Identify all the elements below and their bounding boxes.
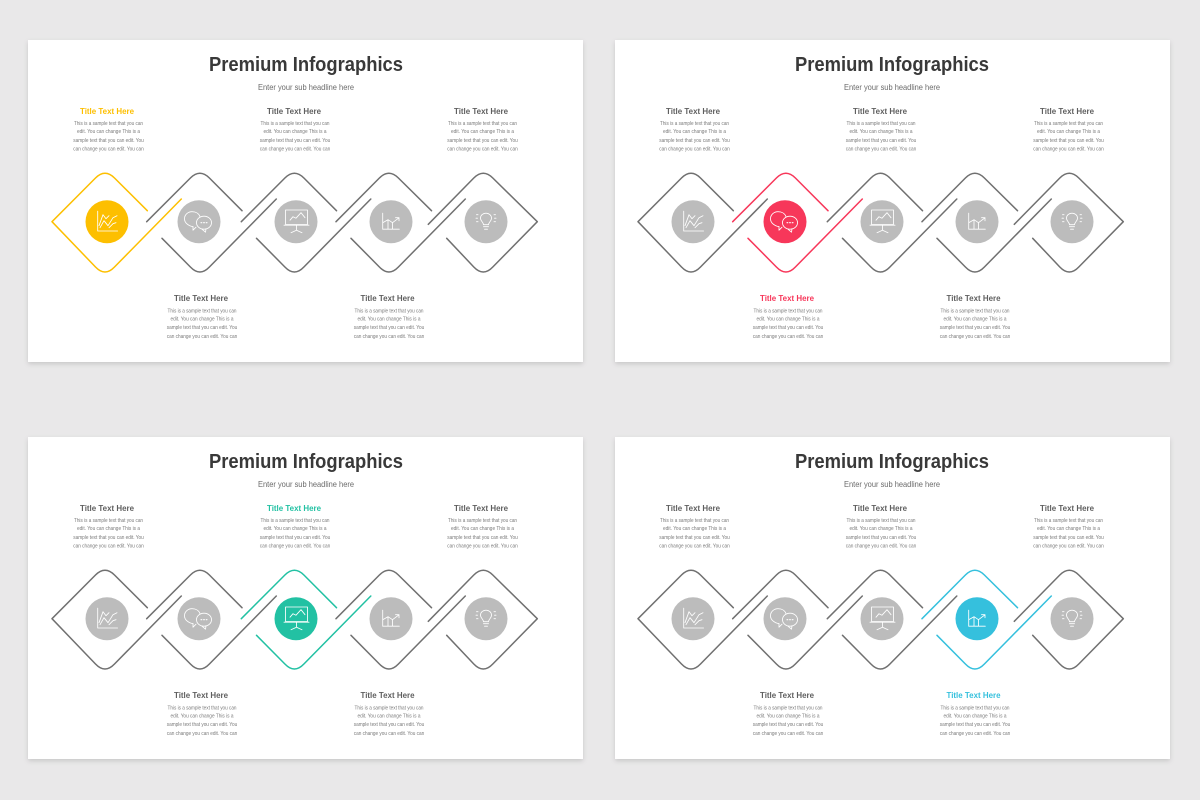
text block 3: can change you can edit. You can [846,544,916,550]
text block 3: sample text that you can edit. You [260,535,330,541]
text block 5: sample text that you can edit. You [447,138,518,144]
text block 2: can change you can edit. You can [753,731,823,737]
text block 2: can change you can edit. You can [753,334,823,340]
icon: presentation board [274,200,318,243]
panel background [615,40,1170,362]
text block 4: This is a sample text that you can [354,308,424,314]
text block 5: can change you can edit. You can [447,146,518,152]
text block 4: Title Text Here [946,293,1001,303]
panel: yellow variant [28,40,583,362]
text block 3: This is a sample text that you can [260,121,330,127]
text block 5: sample text that you can edit. You [1033,138,1104,144]
text block 3 [846,503,916,550]
text block 1: edit. You can change This is a [663,526,726,532]
subtitle: Enter your sub headline here [258,479,354,489]
text block 1: This is a sample text that you can [660,518,729,524]
text block 4: Title Text Here [360,293,415,303]
icon: speech bubbles [178,597,220,640]
text block 5: can change you can edit. You can [447,544,518,550]
text block 2: can change you can edit. You can [167,334,237,340]
text block 1 [659,503,730,550]
text block 1: Title Text Here [80,106,134,116]
icon: presentation board [274,597,318,640]
text block 1 [73,503,144,550]
text block 2: Title Text Here [174,690,228,700]
text block 4 [354,690,424,737]
text block 2: sample text that you can edit. You [167,722,237,728]
text block 4: This is a sample text that you can [940,308,1010,314]
text block 3: Title Text Here [267,503,321,513]
text block 5: This is a sample text that you can [448,518,517,524]
text block 4: sample text that you can edit. You [940,325,1010,331]
text block 4: can change you can edit. You can [940,334,1010,340]
text block 2: can change you can edit. You can [167,731,237,737]
icon: presentation board [860,200,904,243]
text block 1: edit. You can change This is a [663,129,726,135]
text block 5: This is a sample text that you can [1034,518,1103,524]
text block 3: edit. You can change This is a [850,526,913,532]
text block 3: can change you can edit. You can [846,146,916,152]
text block 1: This is a sample text that you can [660,121,729,127]
text block 4: This is a sample text that you can [354,706,424,712]
text block 3: edit. You can change This is a [264,129,327,135]
text block 4: edit. You can change This is a [358,316,421,322]
text block 1: sample text that you can edit. You [73,138,144,144]
icon: speech bubbles [764,597,806,640]
text block 3: edit. You can change This is a [850,129,913,135]
text block 4: Title Text Here [360,690,415,700]
text block 5: edit. You can change This is a [1037,526,1100,532]
icon: light bulb [1050,200,1094,243]
text block 5: edit. You can change This is a [451,526,514,532]
text block 2 [167,293,237,340]
text block 1: can change you can edit. You can [659,146,730,152]
diamond chain [638,173,1123,272]
text block 5: Title Text Here [1040,503,1094,513]
text block 5: edit. You can change This is a [451,129,514,135]
icon: speech bubbles [764,200,806,243]
title: Premium Infographics [795,54,989,76]
text block 2: This is a sample text that you can [168,706,237,712]
text block 3: Title Text Here [853,106,907,116]
text block 3 [260,503,330,550]
text block 5: Title Text Here [1040,106,1094,116]
text block 4: can change you can edit. You can [354,334,424,340]
text block 5: sample text that you can edit. You [1033,535,1104,541]
icon: line chart [672,597,714,640]
text block 3: This is a sample text that you can [846,121,916,127]
text block 1 [73,106,144,152]
text block 3: edit. You can change This is a [264,526,327,532]
text block 1: Title Text Here [666,503,720,513]
icon: light bulb [1050,597,1094,640]
text block 2: This is a sample text that you can [168,308,237,314]
text block 2: sample text that you can edit. You [167,325,237,331]
text block 4: can change you can edit. You can [940,731,1010,737]
text block 5: Title Text Here [454,503,508,513]
text block 4: edit. You can change This is a [944,316,1007,322]
text block 2: edit. You can change This is a [756,714,820,720]
text block 2: edit. You can change This is a [170,714,234,720]
icon: light bulb [464,200,508,243]
icon: speech bubbles [178,200,220,243]
icon: line chart [672,200,714,243]
text block 3 [846,106,916,152]
icon: line chart [86,200,128,243]
diamond chain [638,570,1123,669]
subtitle: Enter your sub headline here [844,479,940,489]
text block 4: Title Text Here [946,690,1001,700]
text block 2: Title Text Here [760,293,814,303]
title: Premium Infographics [795,451,989,473]
text block 4 [940,293,1010,340]
text block 3: Title Text Here [267,106,321,116]
text block 2: This is a sample text that you can [754,706,823,712]
text block 5 [1033,503,1104,550]
text block 1: edit. You can change This is a [77,526,140,532]
text block 4: sample text that you can edit. You [354,722,424,728]
panel background [28,437,583,759]
text block 1 [659,106,730,152]
text block 3: sample text that you can edit. You [260,138,330,144]
text block 2: Title Text Here [760,690,814,700]
text block 3: can change you can edit. You can [260,544,330,550]
text block 5: edit. You can change This is a [1037,129,1100,135]
text block 4: edit. You can change This is a [358,714,421,720]
diamond chain [52,173,537,272]
text block 4: edit. You can change This is a [944,714,1007,720]
text block 4 [940,690,1010,737]
text block 5: can change you can edit. You can [1033,544,1104,550]
text block 1: This is a sample text that you can [74,121,143,127]
text block 5 [447,503,518,550]
text block 5: can change you can edit. You can [1033,146,1104,152]
text block 2: Title Text Here [174,293,228,303]
icon: growth chart [370,200,412,243]
text block 5: This is a sample text that you can [448,121,517,127]
title: Premium Infographics [209,451,403,473]
text block 1: sample text that you can edit. You [73,535,144,541]
panel background [28,40,583,362]
text block 3: can change you can edit. You can [260,146,330,152]
text block 1: This is a sample text that you can [74,518,143,524]
text block 3: sample text that you can edit. You [846,138,916,144]
text block 5: sample text that you can edit. You [447,535,518,541]
text block 2: sample text that you can edit. You [753,325,823,331]
text block 1: edit. You can change This is a [77,129,140,135]
text block 1: can change you can edit. You can [659,544,730,550]
text block 3: sample text that you can edit. You [846,535,916,541]
text block 2: sample text that you can edit. You [753,722,823,728]
panel: red variant [615,40,1170,362]
text block 2: edit. You can change This is a [756,316,820,322]
text block 2 [753,293,823,340]
text block 4: This is a sample text that you can [940,706,1010,712]
subtitle: Enter your sub headline here [844,82,940,92]
text block 3: Title Text Here [853,503,907,513]
icon: line chart [86,597,128,640]
text block 5 [447,106,518,152]
text block 3: This is a sample text that you can [846,518,916,524]
text block 2 [167,690,237,737]
text block 2: This is a sample text that you can [754,308,823,314]
text block 1: can change you can edit. You can [73,146,144,152]
text block 4: sample text that you can edit. You [940,722,1010,728]
panel: teal variant [28,437,583,759]
text block 2 [753,690,823,737]
text block 1: can change you can edit. You can [73,544,144,550]
text block 1: sample text that you can edit. You [659,138,730,144]
panel background [615,437,1170,759]
text block 1: Title Text Here [666,106,720,116]
title: Premium Infographics [209,54,403,76]
panel: blue variant [615,437,1170,759]
text block 5 [1033,106,1104,152]
icon: light bulb [464,597,508,640]
text block 1: sample text that you can edit. You [659,535,730,541]
text block 3 [260,106,330,152]
text block 5: This is a sample text that you can [1034,121,1103,127]
icon: growth chart [956,200,998,243]
icon: presentation board [860,597,904,640]
diamond chain [52,570,537,669]
text block 5: Title Text Here [454,106,508,116]
text block 4 [354,293,424,340]
text block 1: Title Text Here [80,503,134,513]
text block 2: edit. You can change This is a [170,316,234,322]
subtitle: Enter your sub headline here [258,82,354,92]
text block 3: This is a sample text that you can [260,518,330,524]
text block 4: sample text that you can edit. You [354,325,424,331]
icon: growth chart [370,597,412,640]
text block 4: can change you can edit. You can [354,731,424,737]
icon: growth chart [956,597,998,640]
